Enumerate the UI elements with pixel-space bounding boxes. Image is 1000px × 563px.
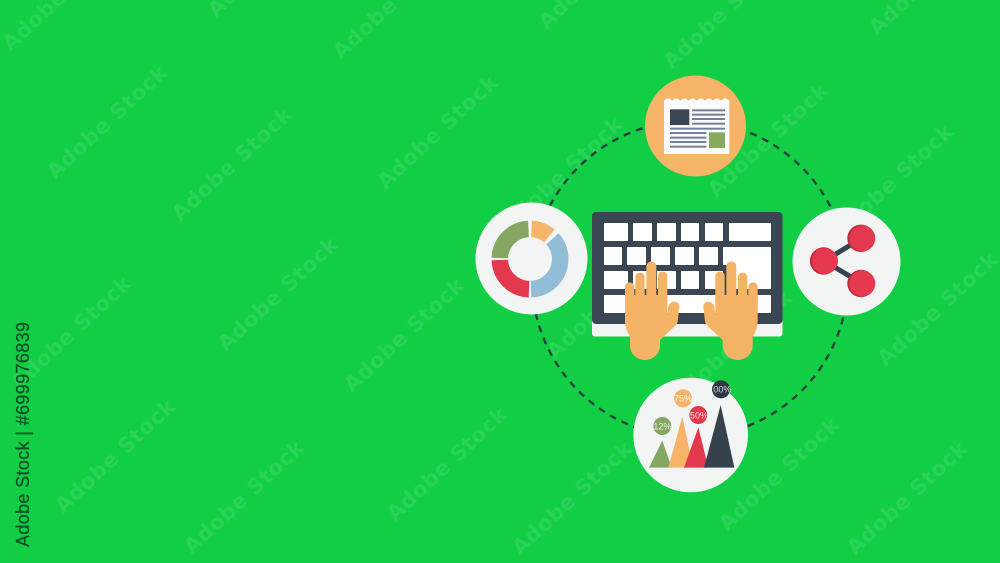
donut segments — [500, 229, 560, 289]
stock watermark pattern: Adobe Stock — [179, 435, 310, 559]
stock watermark pattern: Adobe Stock — [50, 394, 181, 518]
stock watermark pattern: Adobe Stock — [828, 119, 959, 243]
stock watermark pattern: Adobe Stock — [667, 285, 798, 409]
orange circle — [645, 76, 746, 176]
red triangle with 50 percent: 50% — [690, 410, 708, 420]
icon: mountain bar chart in white circle — [633, 378, 748, 492]
dark triangle with 00 percent: 00% — [713, 385, 731, 395]
vertical stock id label: Adobe Stock | #699976839 — [13, 322, 33, 547]
share connectors — [824, 238, 862, 283]
icon: newspaper in orange circle — [645, 76, 746, 176]
stock watermark pattern: Adobe Stock — [6, 271, 137, 395]
stock watermark pattern: Adobe Stock — [373, 70, 503, 194]
orange triangle with 75 percent: 75% — [674, 394, 692, 404]
white circle — [476, 202, 588, 314]
left hand — [625, 262, 679, 360]
stock watermark pattern: Adobe Stock — [542, 240, 673, 364]
dashed connecting ring — [532, 121, 848, 437]
share node bottom — [847, 270, 875, 297]
newspaper artwork — [664, 98, 729, 154]
stock watermark pattern: Adobe Stock — [339, 273, 470, 397]
icon: donut chart in white circle — [476, 202, 588, 314]
right hand — [703, 262, 758, 360]
share node top — [847, 225, 875, 252]
icon: share nodes in white circle — [792, 208, 900, 316]
stock watermark pattern: Adobe Stock — [167, 102, 298, 226]
stock watermark pattern: Adobe Stock — [842, 436, 973, 560]
white circle — [633, 378, 748, 492]
keyboard dark body — [592, 212, 782, 324]
keyboard — [592, 212, 782, 360]
share node left — [810, 247, 838, 275]
stock watermark pattern: Adobe Stock — [382, 402, 513, 526]
stock watermark pattern: Adobe Stock — [703, 78, 834, 202]
keyboard keys — [604, 223, 771, 313]
keyboard light base — [592, 312, 782, 336]
chart artwork — [649, 380, 734, 468]
green triangle with 12 percent: 12% — [653, 421, 671, 431]
white circle — [792, 208, 900, 316]
stock watermark pattern: Adobe Stock — [714, 412, 845, 536]
stock watermark pattern: Adobe Stock — [213, 232, 344, 356]
stock watermark pattern: Adobe Stock — [42, 60, 173, 184]
stock watermark pattern: Adobe Stock — [873, 247, 1000, 371]
stock watermark pattern: Adobe Stock — [498, 112, 628, 236]
stock watermark pattern: Adobe Stock — [507, 436, 638, 560]
